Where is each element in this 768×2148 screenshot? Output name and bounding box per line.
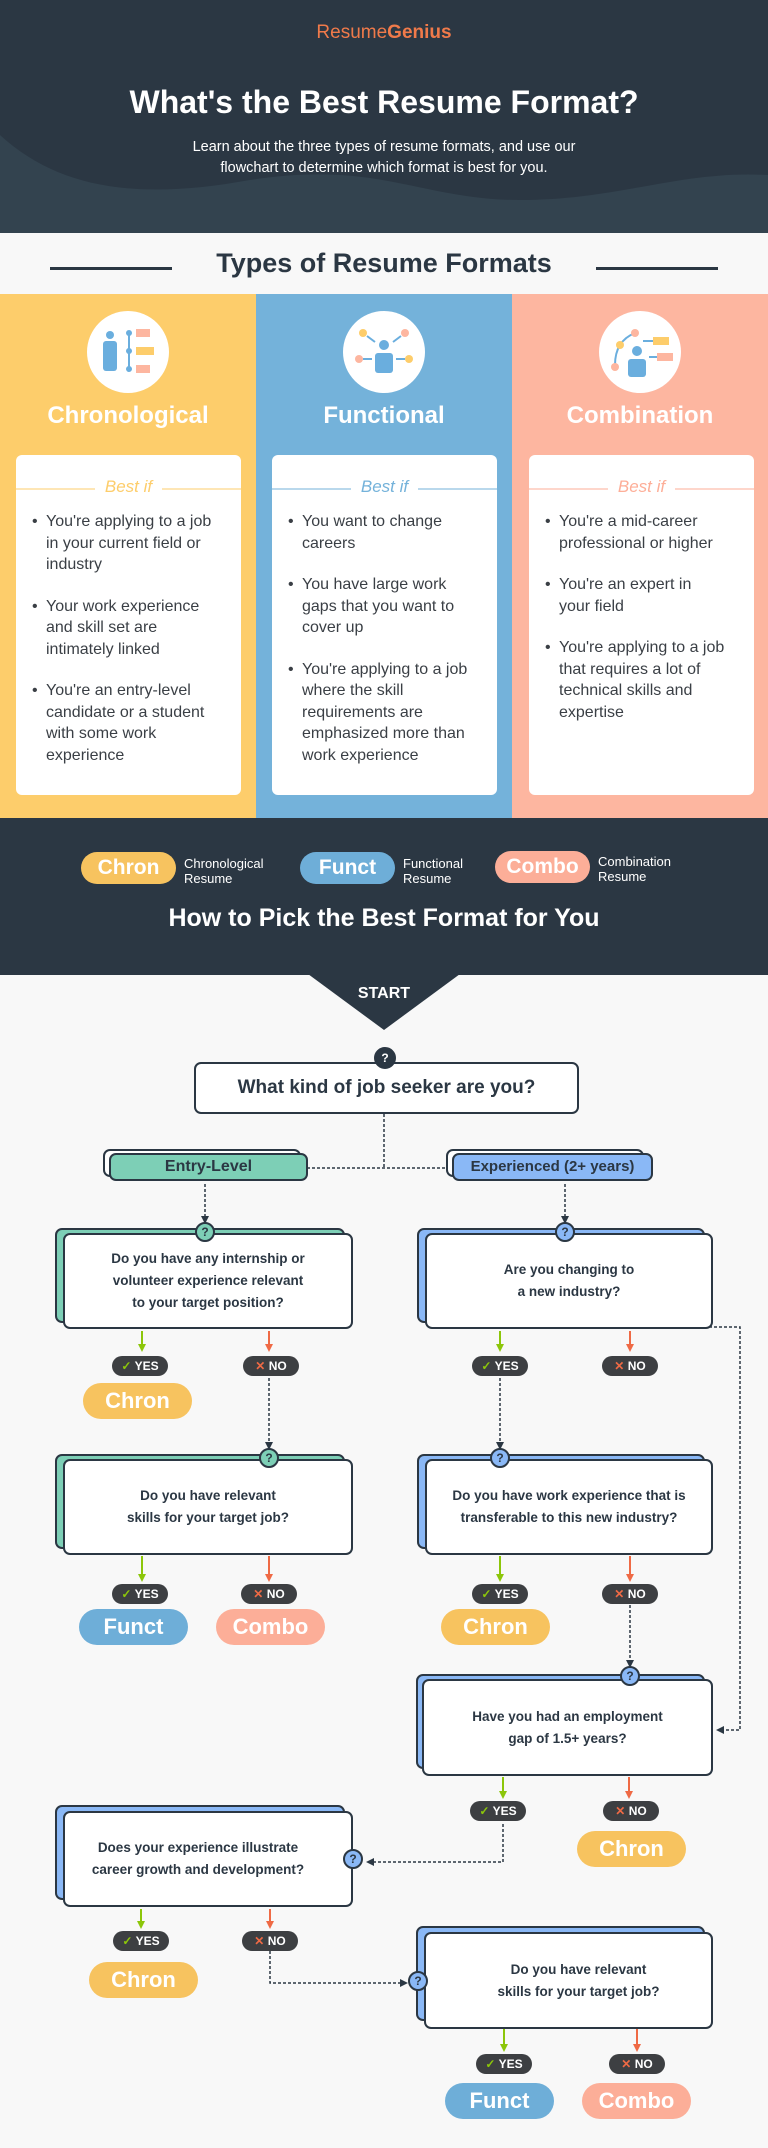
question: relevant skills (right): skills for your target job? (497, 1984, 660, 1998)
question: internship: volunteer experience relevant (113, 1273, 303, 1288)
label: experienced: Experienced (2+ years) (471, 1158, 634, 1175)
label: entry-level: Entry-Level (165, 1158, 252, 1175)
section heading: types: Types of Resume Formats (216, 248, 552, 278)
legend: chron (81, 852, 264, 886)
card: combination best if: Best if (618, 477, 665, 496)
legend: funct: Funct (319, 856, 376, 879)
question: relevant skills (left) (55, 1448, 353, 1555)
answers row 3 (470, 1801, 686, 1867)
legend: combo: Resume (598, 869, 646, 884)
legend: funct: Resume (403, 871, 451, 886)
answers row 2: ✓ YES (121, 1587, 159, 1601)
card: chronological best if: You're applying to a job in your current field or industry (46, 513, 211, 573)
card: functional best if (272, 455, 497, 795)
answers row 4: ✓ YES (122, 1934, 160, 1948)
question: transferable (417, 1448, 713, 1555)
question: employment gap: Have you had an employment (472, 1708, 663, 1724)
answers row 1: Chron (105, 1388, 170, 1413)
question: transferable: transferable to this new industry? (461, 1510, 677, 1525)
question: relevant skills (left): skills for your target job? (127, 1510, 289, 1525)
answers row 2 (79, 1584, 658, 1645)
panel title: functional: Functional (323, 402, 445, 429)
question: internship: Do you have any internship or (111, 1251, 305, 1266)
answers row 1: ✓ YES (121, 1359, 159, 1373)
question: job seeker: What kind of job seeker are you? (238, 1077, 535, 1098)
answers row 1: ✕ NO (614, 1359, 646, 1373)
answers row 3: Chron (599, 1836, 664, 1861)
panel: chronological (0, 294, 256, 818)
card: combination best if: You're an expert in your field (559, 576, 691, 614)
question: transferable: Do you have work experience that is (452, 1488, 686, 1503)
subtitle (193, 139, 576, 176)
card: functional best if: You want to change careers (302, 513, 442, 552)
answers row 1: ✓ YES (481, 1359, 519, 1373)
answers row 2: Chron (463, 1614, 528, 1639)
card: combination best if (529, 455, 754, 795)
legend: combo: Combo (506, 855, 579, 878)
answers row 3: ✕ NO (615, 1804, 647, 1818)
card: chronological best if: Your work experience and skill set are intimately linked (46, 598, 199, 658)
answers row 5: Funct (470, 2088, 529, 2113)
answers row 5: ✓ YES (485, 2057, 523, 2071)
label: entry-level (103, 1149, 308, 1181)
card: chronological best if (16, 455, 241, 795)
legend: funct: Functional (403, 856, 463, 871)
legend: chron: Resume (184, 871, 232, 886)
legend: combo: Combination (598, 854, 671, 869)
panel: functional (256, 294, 512, 818)
start arrow: START (358, 985, 410, 1002)
subtitle: flowchart to determine which format is best for you. (220, 160, 548, 176)
legend: combo (495, 851, 671, 884)
panel title: combination: Combination (567, 402, 713, 429)
panel title: chronological: Chronological (47, 402, 209, 429)
label: experienced (446, 1149, 653, 1181)
card: functional best if: You're applying to a job where the skill requirements are emphasized more than work experience (302, 660, 467, 764)
question: changing industry (417, 1222, 713, 1329)
question: relevant skills (right): ? (414, 1974, 422, 1988)
legend: chron: Chronological (184, 856, 264, 871)
heading: how to pick: How to Pick the Best Format for You (168, 904, 600, 932)
answers row 4 (89, 1931, 298, 1998)
answers row 2: ✕ NO (614, 1587, 646, 1601)
card: combination best if: You're a mid-career professional or higher (559, 513, 713, 552)
answers row 3: ✓ YES (479, 1804, 517, 1818)
panel: combination (512, 294, 768, 818)
question: changing industry: ? (561, 1225, 569, 1239)
question: career growth (55, 1805, 363, 1907)
answers row 5: Combo (599, 2088, 674, 2113)
question: relevant skills (right): Do you have relevant (511, 1962, 646, 1976)
answers row 5: ✕ NO (621, 2057, 653, 2071)
answers row 2: Combo (233, 1614, 308, 1639)
legend: chron: Chron (98, 856, 159, 879)
question: transferable: ? (496, 1451, 504, 1465)
question: relevant skills (left): Do you have relevant (140, 1488, 276, 1503)
start arrow (310, 975, 458, 1030)
question: internship: to your target position? (132, 1295, 284, 1310)
card: functional best if: Best if (361, 477, 408, 496)
answers row 2: ✕ NO (253, 1587, 285, 1601)
title: What's the Best Resume Format? (129, 84, 639, 120)
header background (0, 0, 768, 233)
answers row 1 (83, 1356, 658, 1419)
card: chronological best if: Best if (105, 477, 152, 496)
answers row 2: Funct (104, 1614, 163, 1639)
icon: functional (343, 311, 425, 393)
subtitle: Learn about the three types of resume formats, and use our (193, 139, 575, 155)
question: employment gap (416, 1666, 713, 1776)
question: relevant skills (right) (408, 1926, 713, 2029)
question: employment gap: gap of 1.5+ years? (508, 1730, 627, 1746)
answers row 4: ✕ NO (254, 1934, 286, 1948)
logo: ResumeGenius (316, 22, 452, 43)
question: job seeker (194, 1047, 579, 1114)
question: internship (55, 1222, 353, 1329)
card: functional best if: You have large work gaps that you want to cover up (302, 576, 454, 636)
card: chronological best if: You're an entry-level candidate or a student with some work experience (46, 682, 204, 764)
icon: combination (599, 311, 681, 393)
question: internship: ? (201, 1225, 209, 1239)
question: changing industry: a new industry? (518, 1284, 620, 1299)
card: combination best if: You're applying to a job that requires a lot of technical skills and expertise (559, 639, 724, 720)
question: changing industry: Are you changing to (504, 1262, 634, 1277)
answers row 1: ✕ NO (255, 1359, 287, 1373)
section heading: types (0, 233, 768, 294)
dark section: legend and flow title (0, 818, 768, 975)
question: career growth: ? (349, 1852, 357, 1866)
question: career growth: career growth and development? (92, 1862, 304, 1877)
question: job seeker: ? (381, 1051, 389, 1065)
question: employment gap: ? (626, 1669, 634, 1683)
answers row 5 (445, 2054, 691, 2119)
legend: funct (300, 852, 463, 886)
question: career growth: Does your experience illustrate (98, 1840, 298, 1855)
icon: chronological (87, 311, 169, 393)
answers row 4: Chron (111, 1967, 176, 1992)
question: relevant skills (left): ? (265, 1451, 273, 1465)
answers row 2: ✓ YES (481, 1587, 519, 1601)
